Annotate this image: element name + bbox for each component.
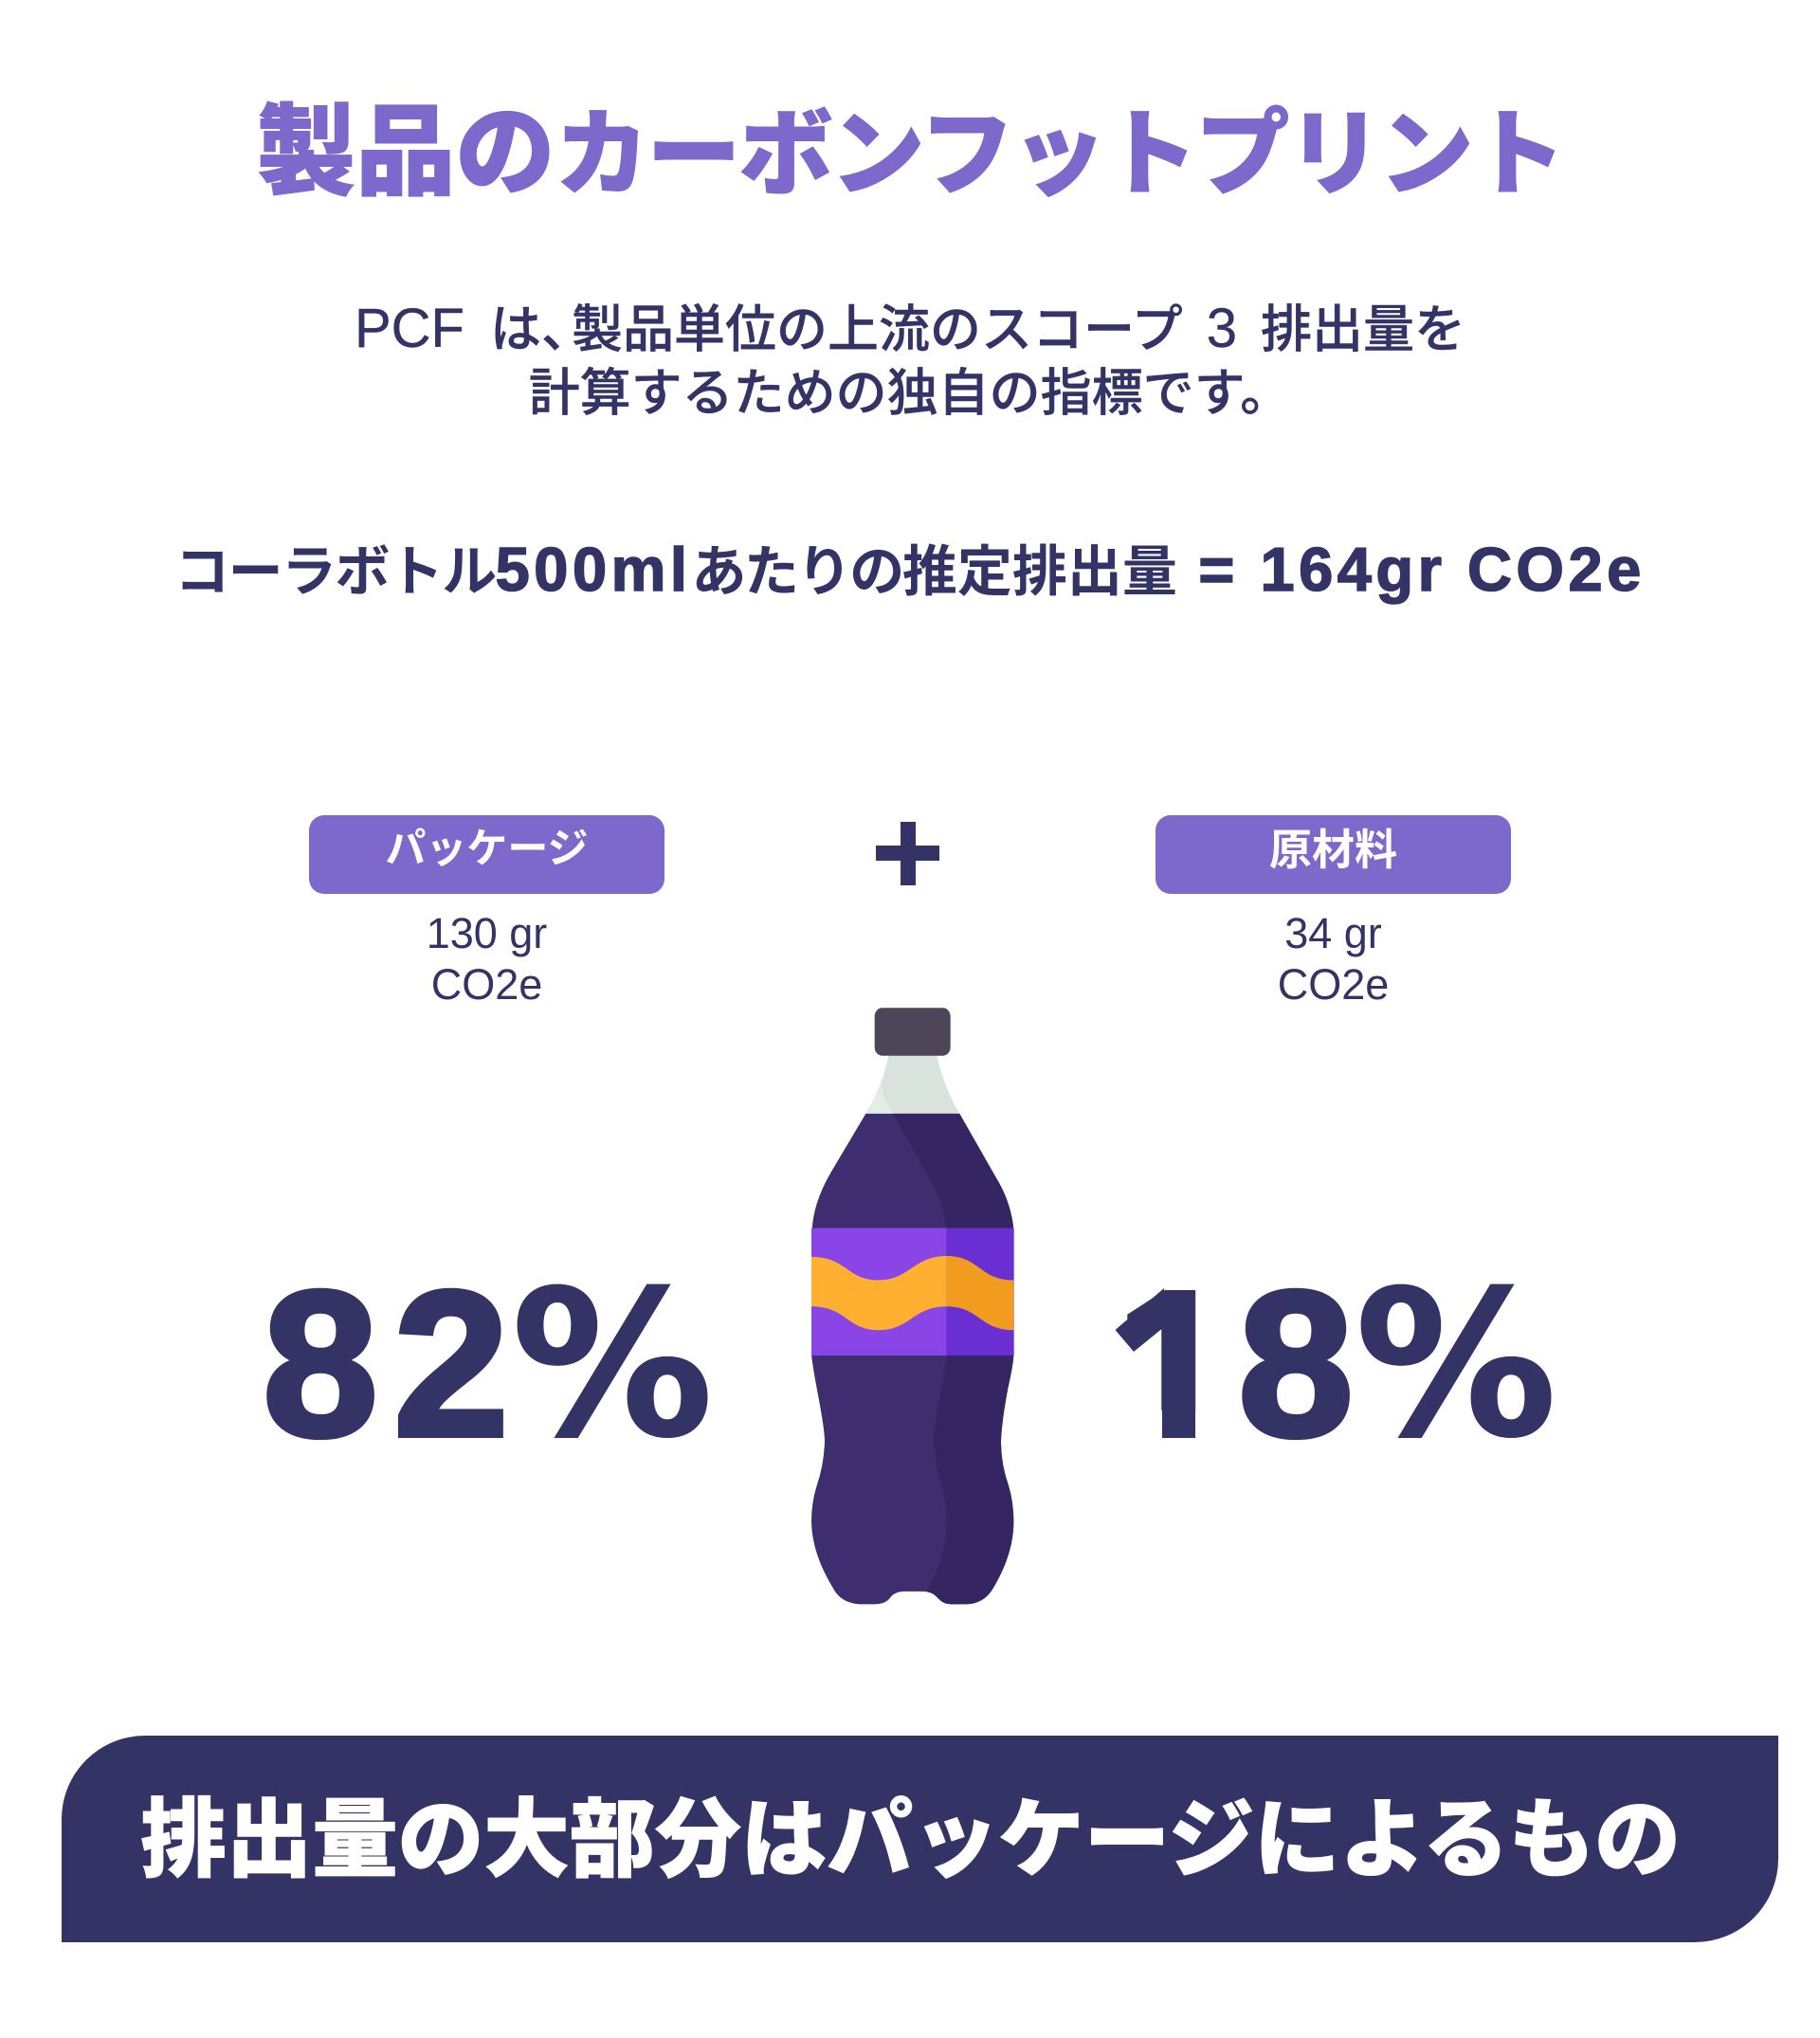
tag: package: パッケージ — [385, 827, 589, 872]
label — [811, 1228, 1014, 1356]
bottom banner — [62, 1736, 1778, 1942]
body — [811, 1114, 1013, 1604]
18 percent: 8 — [1238, 1249, 1354, 1480]
18 percent: 1 — [1116, 1249, 1231, 1480]
title: 製品のカーボンフットプリント — [256, 98, 1564, 209]
intro text — [355, 298, 1465, 422]
intro text: PCF は、製品単位の上流のスコープ 3 排出量を — [355, 298, 1465, 359]
82 percent — [263, 1247, 713, 1482]
package value — [427, 909, 547, 1009]
18 percent: % — [1356, 1247, 1556, 1482]
raw materials value — [1278, 909, 1389, 1009]
18 percent — [1115, 1247, 1556, 1482]
82 percent: 8 — [263, 1249, 378, 1480]
intro text: 計算するための独自の指標です。 — [529, 365, 1291, 422]
raw materials value: 34 gr — [1284, 909, 1382, 957]
plus sign — [876, 822, 939, 885]
raw materials value: CO2e — [1278, 960, 1389, 1009]
package value: CO2e — [431, 960, 542, 1009]
tag: package — [309, 815, 664, 894]
tag: raw materials: 原材料 — [1269, 826, 1397, 874]
package value: 130 gr — [427, 909, 547, 957]
banner text: 排出量の大部分はパッケージによるもの — [140, 1792, 1681, 1888]
tag: raw materials — [1156, 815, 1511, 894]
bottle illustration — [811, 1008, 1014, 1604]
cap — [875, 1008, 951, 1056]
82 percent: % — [512, 1247, 713, 1482]
neck — [865, 1056, 959, 1114]
estimated emissions headline: コーラボトル500mlあたりの推定排出量 = 164gr CO2e — [174, 535, 1646, 604]
82 percent: 2 — [393, 1249, 509, 1480]
